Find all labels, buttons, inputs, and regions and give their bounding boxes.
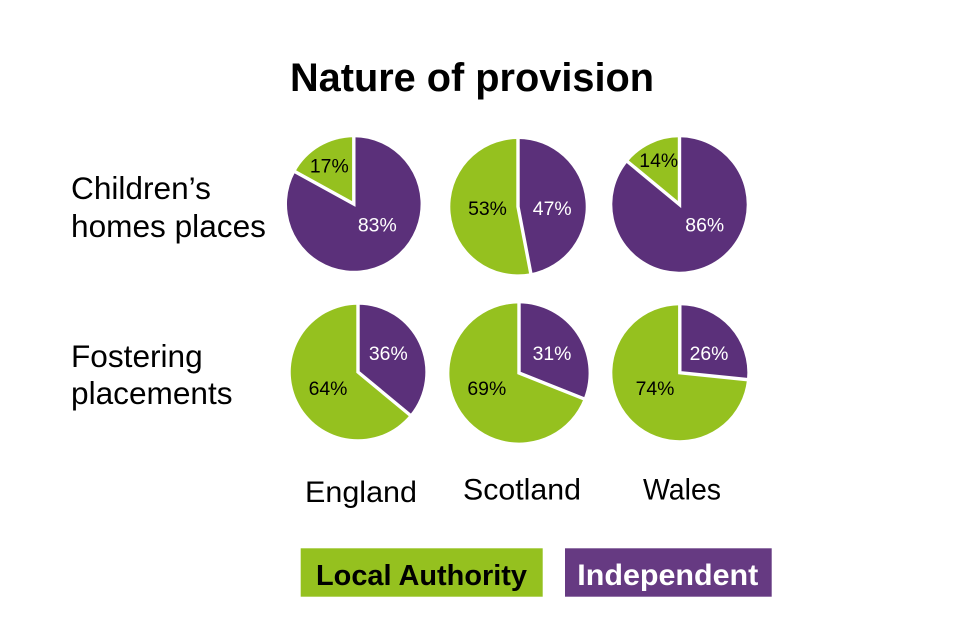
pie chart: Scotland children's homes: 47% (533, 198, 572, 220)
legend: Local Authority (301, 548, 543, 597)
row label: children's homes places: homes places (71, 208, 266, 244)
row label: fostering placements: Fostering (71, 338, 203, 374)
pie chart: Scotland children's homes: 53% (468, 198, 507, 220)
legend: Local Authority: Local Authority (316, 560, 527, 592)
legend: Independent (565, 548, 772, 597)
row label: children's homes places: Children’s (71, 170, 211, 206)
country label: England: England (305, 476, 417, 509)
row label: fostering placements: placements (71, 375, 233, 411)
country label: Wales: Wales (643, 474, 721, 507)
pie chart: Wales fostering: 26% (690, 343, 728, 365)
pie chart: Scotland fostering: 31% (533, 343, 571, 365)
pie chart: Wales children's homes: 14% (639, 150, 678, 172)
row label: fostering placements (71, 338, 233, 411)
pie chart: England fostering: 64% (309, 378, 347, 400)
pie chart: Wales fostering: 74% (636, 378, 674, 400)
pie chart: England fostering: 36% (369, 343, 408, 365)
title: Nature of provision (290, 56, 654, 100)
pie chart: England children's homes: 17% (310, 156, 349, 178)
country label: Scotland: Scotland (463, 474, 581, 507)
row label: children's homes places (71, 170, 266, 244)
pie chart: Wales children's homes (612, 134, 747, 272)
pie chart: Wales fostering (612, 302, 751, 440)
pie chart: England children's homes: 83% (358, 215, 397, 237)
pie chart: Scotland children's homes (450, 135, 586, 277)
pie chart: Wales children's homes: 86% (685, 215, 724, 237)
pie chart: Scotland fostering (449, 300, 589, 443)
pie chart: Scotland fostering: 69% (467, 378, 506, 400)
legend: Independent: Independent (577, 559, 758, 592)
pie chart: England children's homes (287, 134, 421, 271)
pie chart: England fostering (291, 301, 425, 439)
